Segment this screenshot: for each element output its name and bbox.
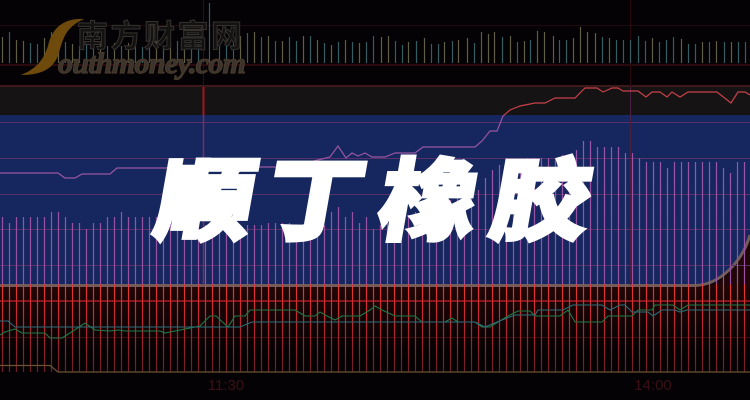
watermark logo swoosh: [21, 19, 84, 75]
panel edge: [0, 235, 750, 286]
watermark: site URL: outhmoney.com: [58, 47, 246, 80]
title: 顺丁橡胶: [149, 152, 599, 252]
vertical bars chart: [2, 141, 744, 372]
teal indicator line: [0, 305, 750, 327]
lower red panel: [0, 237, 750, 372]
price line: [0, 88, 750, 178]
green indicator line: [0, 305, 750, 338]
volume chart: [2, 3, 746, 63]
time cursor line: [202, 87, 204, 115]
price band: [0, 87, 750, 115]
axis label: 14:00: 14:00: [634, 377, 672, 394]
gridlines top: [0, 0, 750, 115]
second cursor line: [630, 87, 632, 285]
watermark: site name Chinese: 南方财富网: [77, 19, 242, 54]
axis label: 11:30: 11:30: [208, 377, 244, 394]
tan baseline line: [0, 366, 750, 372]
time cursor line in panel: [202, 115, 204, 285]
blue panel: [0, 115, 750, 285]
gridlines over chart: [0, 122, 750, 338]
